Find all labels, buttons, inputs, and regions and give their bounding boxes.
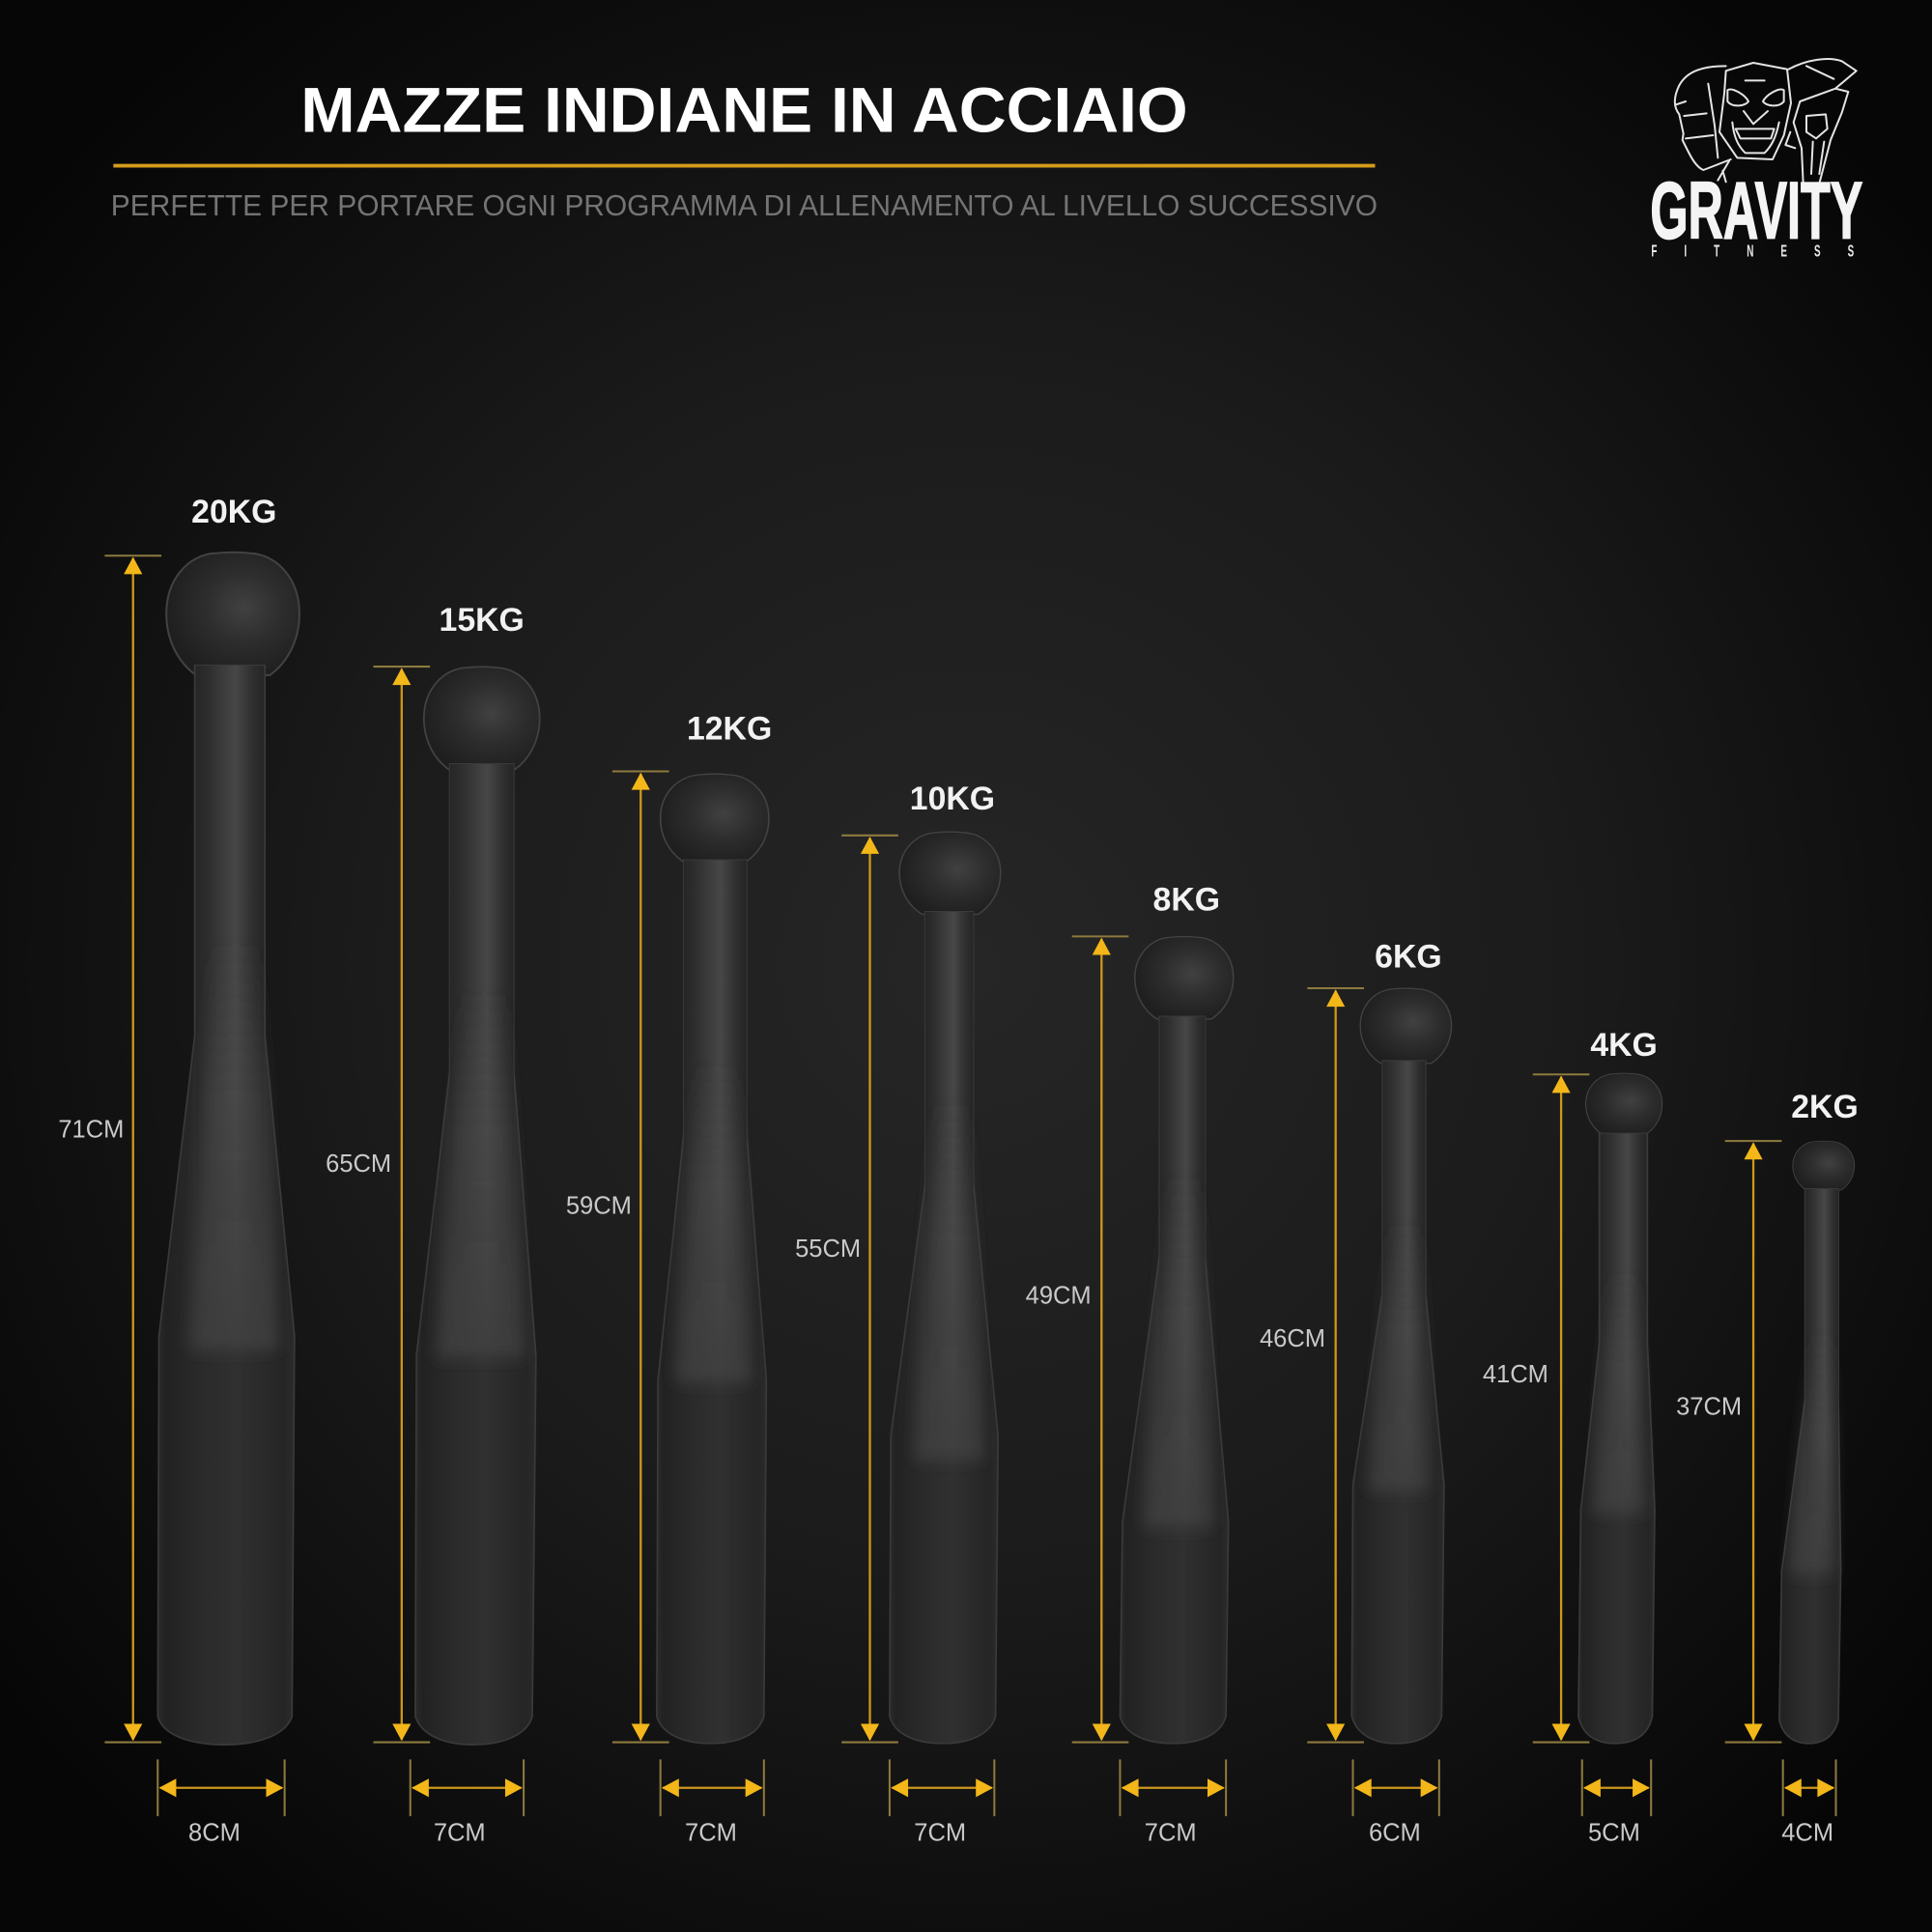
width label: 7CM	[685, 1820, 737, 1847]
width dimension	[661, 1759, 764, 1816]
width dimension	[1783, 1759, 1836, 1816]
club group: 6KG	[1260, 938, 1452, 1847]
club	[1779, 1141, 1855, 1744]
width dimension	[1582, 1759, 1651, 1816]
club group: 20KG	[58, 494, 299, 1847]
width label: 5CM	[1588, 1820, 1640, 1847]
weight label: 8KG	[1153, 882, 1220, 919]
height dimension	[612, 771, 669, 1743]
weight label: 12KG	[687, 710, 772, 747]
height label: 71CM	[58, 1116, 124, 1143]
height dimension	[1307, 988, 1364, 1743]
height label: 65CM	[326, 1151, 391, 1178]
subtitle: PERFETTE PER PORTARE OGNI PROGRAMMA DI ALLENAMENTO AL LIVELLO SUCCESSIVO	[111, 189, 1378, 222]
width label: 7CM	[914, 1820, 966, 1847]
club group: 10KG	[795, 781, 1001, 1847]
club	[890, 832, 1001, 1744]
width label: 6CM	[1369, 1820, 1421, 1847]
width dimension	[1120, 1759, 1226, 1816]
club group: 4KG	[1483, 1027, 1662, 1847]
height dimension	[104, 555, 161, 1743]
icon: three faces	[1675, 59, 1857, 184]
club	[1120, 937, 1234, 1744]
height label: 46CM	[1260, 1325, 1325, 1352]
height dimension	[1725, 1141, 1781, 1743]
height label: 41CM	[1483, 1361, 1548, 1388]
width dimension	[890, 1759, 994, 1816]
height dimension	[841, 836, 898, 1743]
weight label: 10KG	[910, 781, 995, 817]
width dimension	[1353, 1759, 1439, 1816]
weight label: 4KG	[1590, 1027, 1658, 1064]
height dimension	[1072, 936, 1128, 1743]
club	[1351, 988, 1452, 1744]
club	[1578, 1073, 1662, 1744]
weight label: 15KG	[440, 602, 525, 639]
width label: 8CM	[188, 1820, 241, 1847]
height label: 59CM	[566, 1192, 632, 1219]
club group: 2KG	[1676, 1089, 1859, 1847]
width label: 4CM	[1781, 1820, 1833, 1847]
width dimension	[411, 1759, 524, 1816]
weight label: 2KG	[1791, 1089, 1859, 1125]
club group: 12KG	[566, 710, 772, 1847]
title: MAZZE INDIANE IN ACCIAIO	[300, 74, 1188, 146]
club	[157, 553, 299, 1745]
logo: Gravity Fitness	[1650, 59, 1862, 261]
width label: 7CM	[434, 1820, 486, 1847]
width label: 7CM	[1145, 1820, 1197, 1847]
height label: 37CM	[1676, 1393, 1742, 1420]
title underline	[113, 164, 1375, 167]
club group: 15KG	[326, 602, 540, 1847]
height dimension	[1533, 1074, 1589, 1743]
weight label: 20KG	[191, 494, 276, 530]
logo tagline: FITNESS	[1651, 242, 1854, 261]
height label: 49CM	[1026, 1282, 1092, 1309]
weight label: 6KG	[1375, 938, 1442, 975]
club group: 8KG	[1026, 882, 1234, 1847]
height label: 55CM	[795, 1236, 861, 1263]
width dimension	[157, 1759, 285, 1816]
height dimension	[373, 667, 430, 1743]
club	[415, 667, 540, 1745]
club	[657, 774, 769, 1744]
